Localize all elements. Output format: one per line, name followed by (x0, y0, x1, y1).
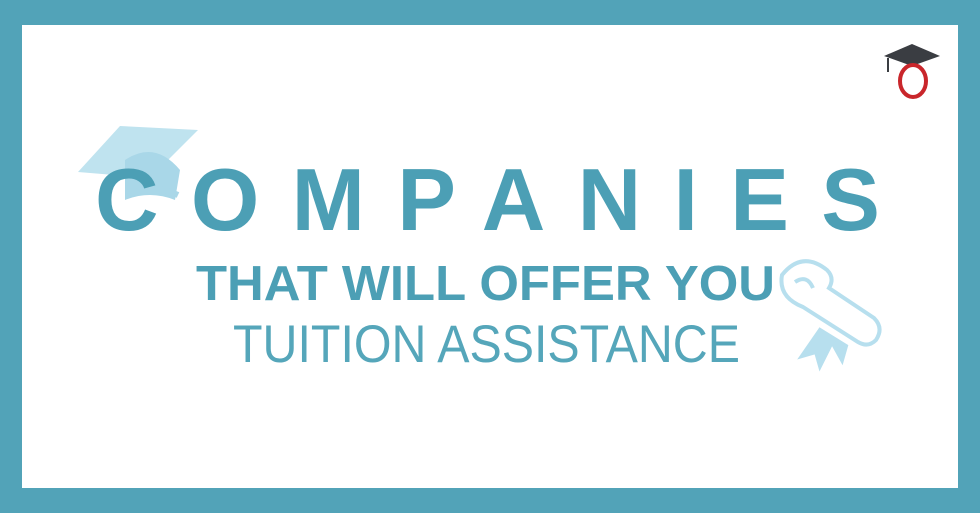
subtitle: THAT WILL OFFER YOU: THAT WILL OFFER YOU (196, 257, 775, 311)
subtitle: TUITION ASSISTANCE: TUITION ASSISTANCE (233, 315, 740, 374)
title: COMPANIES: COMPANIES (95, 150, 880, 249)
icon: diploma scroll (781, 261, 880, 366)
icon: graduation cap (78, 126, 198, 200)
logo (884, 44, 940, 97)
